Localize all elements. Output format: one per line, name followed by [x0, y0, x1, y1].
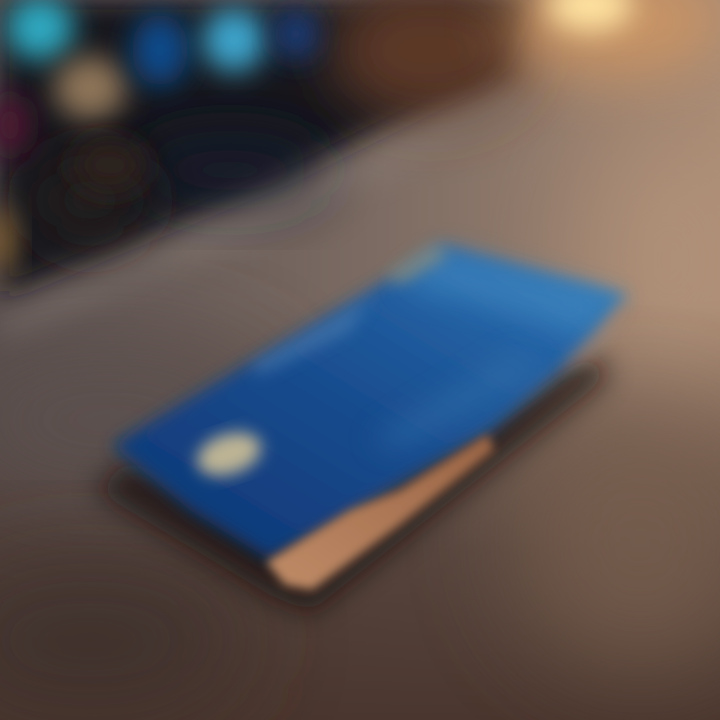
right card edge [560, 300, 632, 370]
copper edge [266, 434, 494, 590]
card top sheen [400, 250, 615, 335]
warm light glow [500, 0, 720, 80]
blue card [112, 245, 628, 560]
card top edge glint [385, 245, 450, 285]
bokeh lights [0, 0, 318, 274]
table edge highlight [0, 90, 540, 340]
dark blurred background [0, 0, 530, 295]
card shadow [95, 355, 610, 612]
card lower reflection [370, 350, 540, 450]
card chip [191, 425, 267, 483]
card reflection streak [250, 300, 370, 375]
